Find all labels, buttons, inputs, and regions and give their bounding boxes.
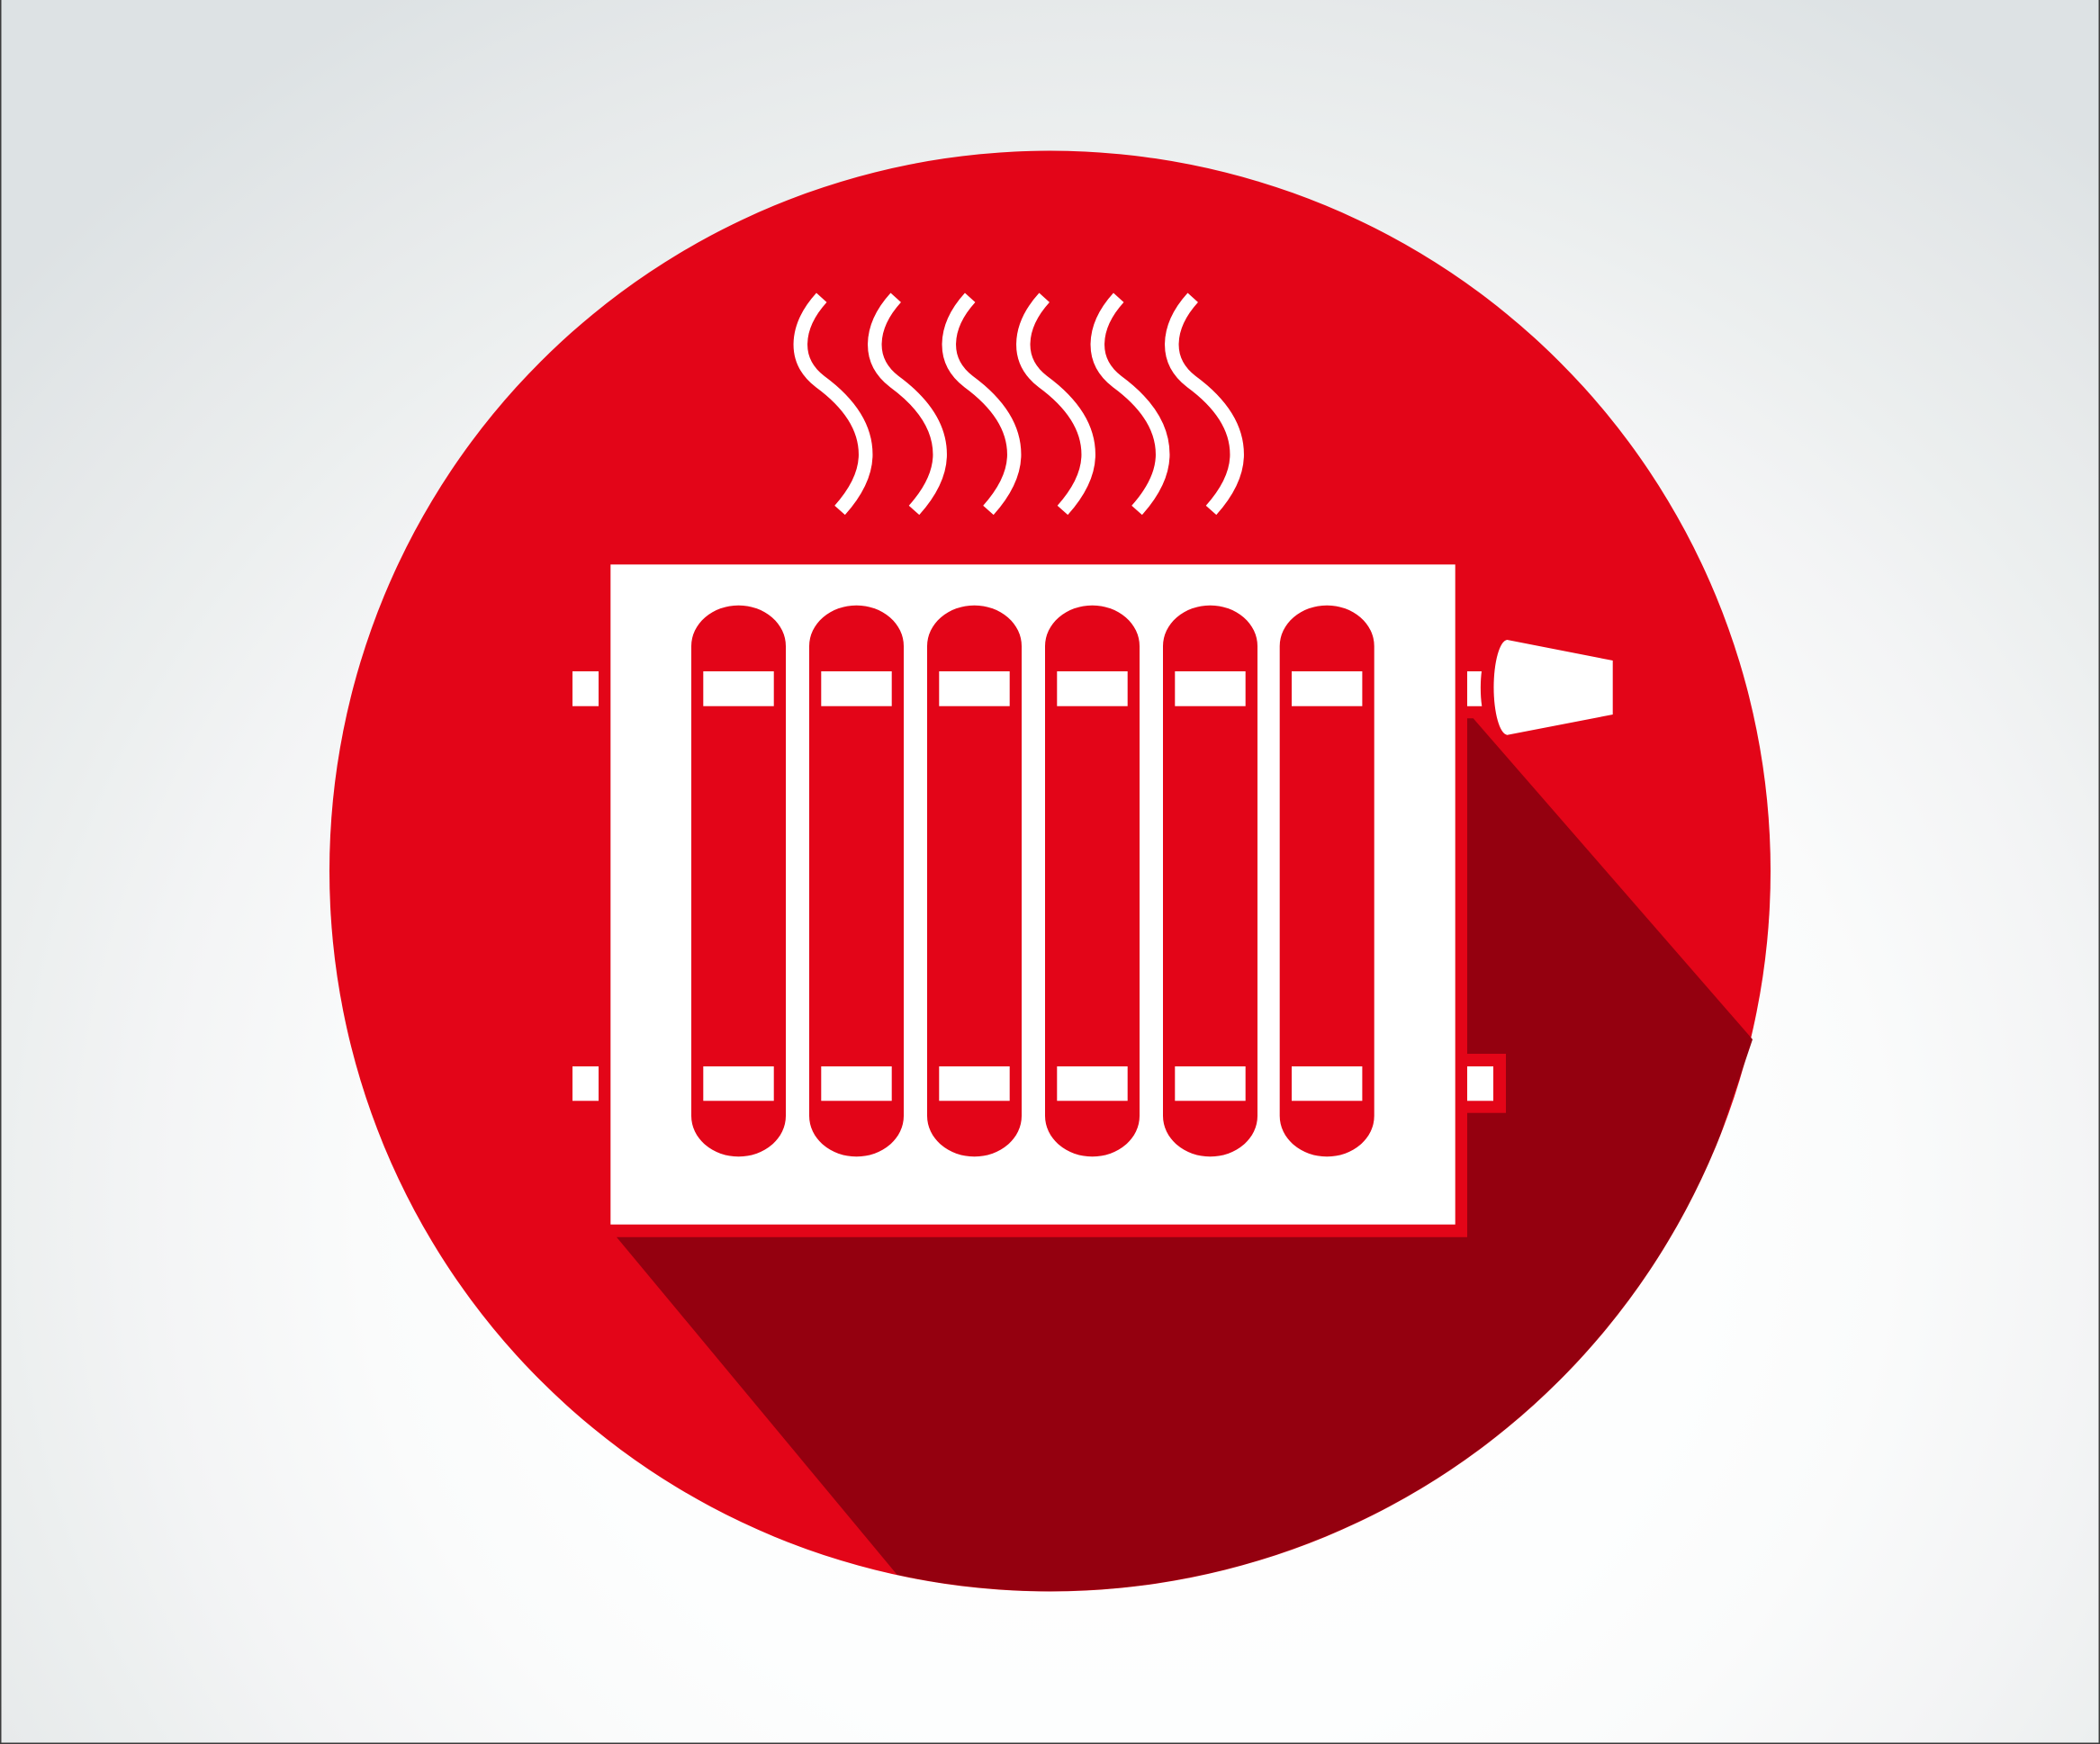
- red circle badge: [329, 151, 1771, 1591]
- fin 1: [691, 606, 786, 1156]
- left lower bracket: [572, 1066, 599, 1101]
- right upper pipe stub: [1467, 671, 1482, 706]
- fin 3: [927, 606, 1022, 1156]
- fin 5: [1163, 606, 1257, 1156]
- heat wave 4: [1023, 298, 1088, 510]
- heat waves: [800, 298, 1237, 510]
- long drop shadow of radiator: [617, 718, 1753, 1591]
- heat wave 6: [1172, 298, 1237, 510]
- left upper bracket: [572, 671, 599, 706]
- thermostatic valve: [1493, 640, 1613, 735]
- fin 2: [809, 606, 904, 1156]
- heat wave 1: [800, 298, 866, 510]
- fin 4: [1045, 606, 1140, 1156]
- radiator body: [610, 564, 1456, 1225]
- radiator panel: [610, 564, 1456, 1225]
- heat wave 2: [875, 298, 940, 510]
- right lower pipe connector: [1467, 1054, 1506, 1113]
- fin 6: [1280, 606, 1374, 1156]
- heat wave 3: [949, 298, 1014, 510]
- heat wave 5: [1097, 298, 1163, 510]
